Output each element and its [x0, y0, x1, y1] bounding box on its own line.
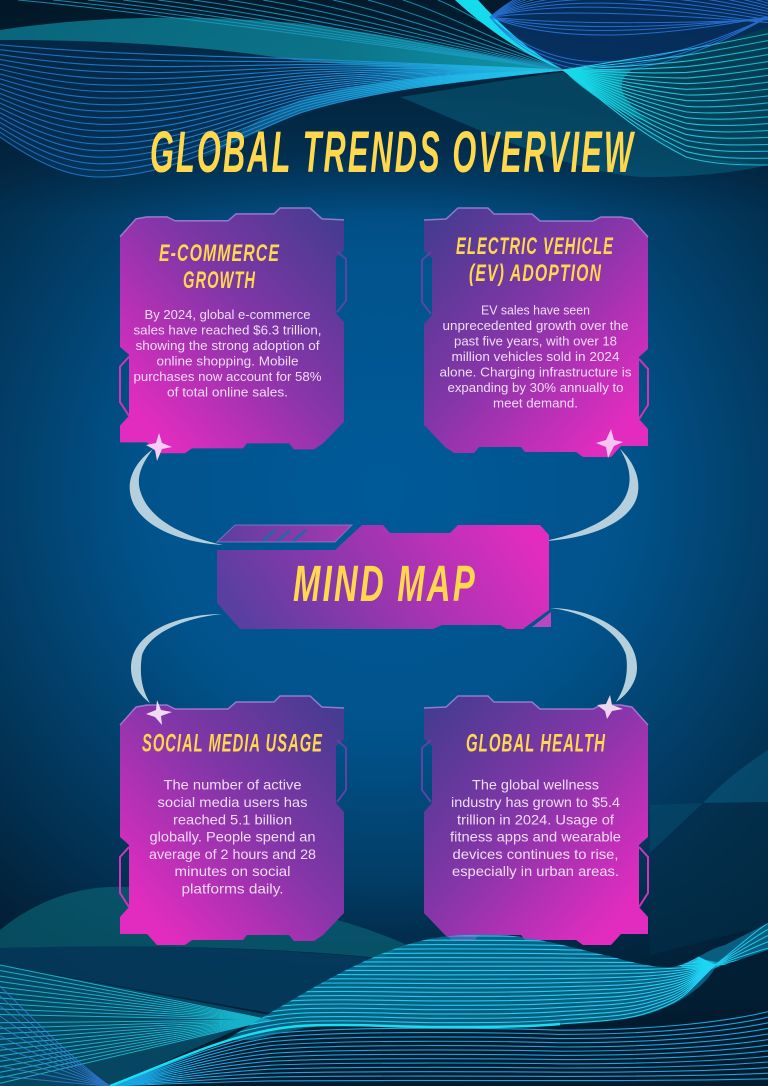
heading: ELECTRIC VEHICLE — [456, 233, 614, 260]
body text — [149, 776, 316, 896]
body text: minutes on social — [174, 863, 290, 879]
body text: The number of active — [164, 776, 302, 792]
heading — [159, 240, 280, 294]
body text: expanding by 30% annually to — [448, 381, 624, 395]
body text: social media users has — [158, 794, 308, 810]
bottom wave pattern — [0, 908, 768, 1086]
body text — [450, 776, 621, 879]
body text: past five years, with over 18 — [454, 334, 617, 348]
heading: SOCIAL MEDIA USAGE — [142, 730, 323, 758]
body text: million vehicles sold in 2024 — [452, 350, 620, 364]
body text: unprecedented growth over the — [442, 319, 629, 333]
body text — [134, 308, 322, 400]
body text: of total online sales. — [167, 386, 288, 400]
arrow: bottom right arc — [550, 608, 637, 702]
arrow: bottom left arc — [131, 614, 222, 703]
body text: fitness apps and wearable — [450, 828, 621, 844]
banner tab — [217, 525, 352, 542]
icon: star bottom right — [597, 695, 623, 719]
card shape — [120, 696, 346, 945]
body text: alone. Charging infrastructure is — [440, 366, 632, 380]
heading — [456, 233, 614, 287]
heading: (EV) ADOPTION — [469, 260, 602, 287]
body text: EV sales have seen — [481, 304, 590, 318]
icon: star top left — [146, 433, 172, 461]
body text: devices continues to rise, — [452, 846, 618, 862]
bottom right sheet pattern — [650, 750, 768, 955]
body text: reached 5.1 billion — [173, 812, 292, 828]
top wave pattern — [0, 0, 768, 177]
body text: industry has grown to $5.4 — [451, 794, 620, 810]
body text: The global wellness — [472, 776, 599, 792]
body text: platforms daily. — [182, 880, 284, 896]
icon: star bottom left — [146, 700, 172, 725]
body text: especially in urban areas. — [452, 863, 619, 879]
body text: By 2024, global e-commerce — [144, 308, 311, 322]
body text: average of 2 hours and 28 — [149, 846, 316, 862]
body text: globally. People spend an — [150, 828, 316, 844]
banner corner — [532, 612, 551, 627]
panel: global health — [422, 696, 648, 945]
body text: sales have reached $6.3 trillion, — [134, 324, 322, 338]
body text: showing the strong adoption of — [136, 339, 320, 353]
panel: mind map banner — [217, 525, 551, 629]
panel: electric vehicle adoption — [422, 208, 648, 457]
body text: purchases now account for 58% — [134, 370, 322, 384]
heading: GROWTH — [183, 267, 256, 294]
body text: meet demand. — [493, 396, 578, 410]
banner heading: MIND MAP — [293, 555, 477, 612]
card shape — [422, 696, 648, 945]
banner body — [217, 525, 549, 629]
heading: GLOBAL HEALTH — [466, 730, 606, 758]
arrow: top right arc — [545, 449, 638, 541]
panel: e-commerce growth — [120, 208, 346, 453]
body text — [440, 304, 632, 410]
panel: social media usage — [120, 696, 346, 945]
body text: online shopping. Mobile — [156, 354, 299, 368]
icon: star top right — [596, 429, 623, 458]
body text: trillion in 2024. Usage of — [457, 812, 614, 828]
heading: E-COMMERCE — [159, 240, 280, 267]
card shape — [120, 208, 346, 453]
card shape — [422, 208, 648, 457]
bottom left sheet pattern — [0, 887, 407, 1013]
arrow: top left arc — [130, 449, 223, 545]
